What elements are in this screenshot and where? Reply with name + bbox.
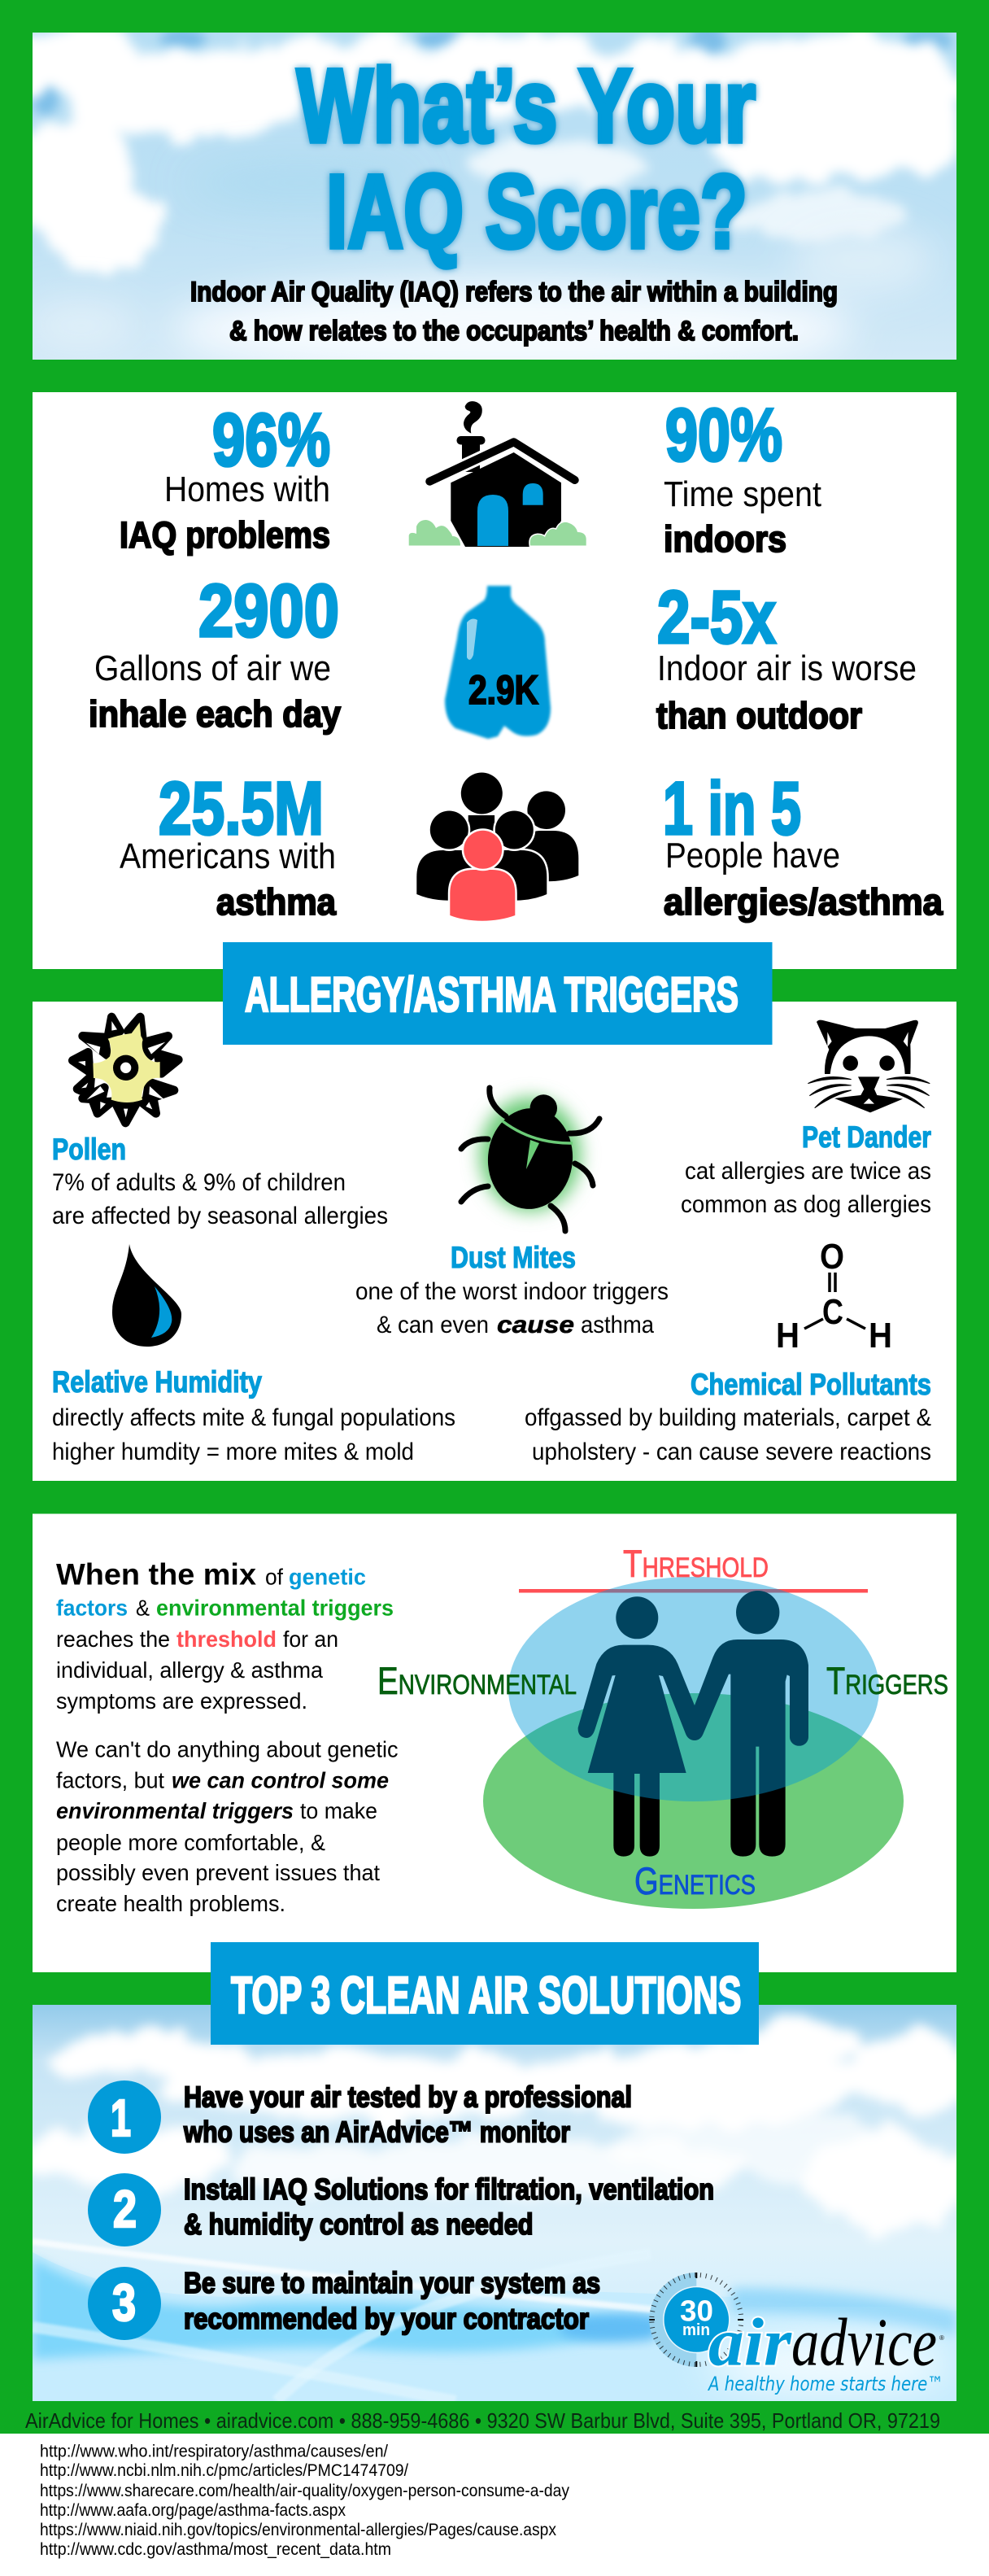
icon: house (409, 401, 586, 547)
text: dust mites: cause (497, 1312, 574, 1338)
banner: allergy/asthma triggers (223, 942, 773, 1045)
intro text: & how relates to the occupants’ health & comfort. (229, 316, 799, 347)
text block: explanation: for an (283, 1626, 338, 1652)
text: dust mites: asthma (581, 1312, 654, 1338)
text block: explanation: genetic (289, 1564, 366, 1590)
step 3 (88, 2266, 600, 2340)
panel: header (4, 23, 968, 378)
icon: formaldehyde molecule: C (822, 1292, 843, 1332)
stat: 2-5x: Indoor air is worse (657, 648, 917, 688)
stat: 1 in 5 (663, 767, 943, 923)
logo: airadvice (649, 2273, 944, 2395)
intro text: Indoor Air Quality (IAQ) refers to the air within a building (190, 277, 838, 308)
stat: 2-5x: 2-5x (657, 576, 776, 659)
text block: explanation: symptoms are expressed. (56, 1688, 307, 1714)
step 1: Have your air tested by a professional (184, 2080, 632, 2114)
icon: group of people (416, 773, 578, 921)
text block: explanation: individual, allergy & asthma (56, 1657, 323, 1683)
intro text (190, 277, 838, 347)
text: chemical pollutants: upholstery - can cause severe reactions (532, 1439, 931, 1465)
text: chemical pollutants: offgassed by building materials, carpet & (525, 1404, 931, 1431)
text block: explanation: to make (300, 1798, 377, 1823)
stat: 25.5M (120, 767, 337, 923)
icon: formaldehyde molecule: H (869, 1316, 892, 1356)
stat: 2900 gallons (89, 570, 341, 735)
panel: triggers (33, 1002, 956, 1481)
icon: cat (808, 1020, 930, 1112)
text: pollen (52, 1133, 388, 1229)
text: pet dander: Pet Dander (802, 1120, 931, 1154)
logo: airadvice: ® (939, 2334, 944, 2342)
text: dust mites: one of the worst indoor triggers (355, 1278, 669, 1305)
panel: statistics (33, 392, 956, 969)
text block: explanation: threshold (176, 1626, 277, 1652)
icon: formaldehyde molecule: O (820, 1237, 844, 1277)
icon: milk jug: 2.9K (468, 667, 538, 713)
step 2: Install IAQ Solutions for filtration, ventilation (184, 2172, 714, 2206)
step 1: 1 (111, 2089, 131, 2147)
logo: airadvice: min (682, 2321, 710, 2339)
logo: airadvice: 30 (680, 2294, 713, 2328)
stat: 96% homes (120, 399, 330, 556)
banner: top 3 clean air solutions (211, 1942, 759, 2045)
step 2: & humidity control as needed (184, 2207, 534, 2241)
step 2 (88, 2172, 714, 2246)
text: pet dander: common as dog allergies (681, 1191, 931, 1218)
step 3: recommended by your contractor (184, 2302, 589, 2335)
text block: explanation: people more comfortable, & (56, 1830, 325, 1855)
title: What’s Your (297, 48, 756, 164)
step 3: 3 (112, 2273, 136, 2332)
stat: 96% homes: IAQ problems (120, 514, 330, 556)
logo: airadvice: air (708, 2305, 792, 2381)
text: pet dander (681, 1120, 931, 1218)
stat: 2900 gallons: inhale each day (89, 693, 341, 735)
text block: explanation: of (265, 1564, 283, 1590)
step 3: Be sure to maintain your system as (184, 2266, 600, 2299)
text: chemical pollutants (525, 1368, 931, 1465)
logo: airadvice: A healthy home starts here™ (707, 2373, 943, 2395)
stat: 2900 gallons: 2900 (198, 570, 339, 653)
sources list: http://www.cdc.gov/asthma/most_recent_data.htm (40, 2540, 391, 2559)
step 1 (88, 2080, 632, 2154)
label: genetics: GENETICS (634, 1859, 756, 1902)
stat: 96% homes: Homes with (164, 469, 330, 509)
stat: 1 in 5: allergies/asthma (664, 881, 943, 923)
stat: 2-5x: than outdoor (656, 695, 862, 736)
text: chemical pollutants: Chemical Pollutants (691, 1368, 931, 1401)
text: pet dander: cat allergies are twice as (685, 1158, 931, 1185)
stat: 90% time: Time spent (664, 474, 821, 514)
text block: explanation: environmental triggers (56, 1798, 294, 1823)
stat: 25.5M: 25.5M (159, 767, 324, 850)
sources list: http://www.who.int/respiratory/asthma/causes/en/ (40, 2443, 388, 2460)
text block: explanation: When the mix (56, 1557, 256, 1591)
stat: 96% homes: 96% (212, 399, 330, 482)
stat: 90% time (664, 394, 821, 560)
text block: explanation: create health problems. (56, 1891, 285, 1916)
banner: top 3 clean air solutions: TOP 3 CLEAN AIR SOLUTIONS (231, 1966, 742, 2024)
sources list: http://www.ncbi.nlm.nih.c/pmc/articles/PMC1474709/ (40, 2461, 408, 2480)
stat: 1 in 5: 1 in 5 (663, 767, 801, 850)
panel: solutions (16, 2005, 976, 2401)
text: pollen: 7% of adults & 9% of children (52, 1169, 346, 1196)
text block: explanation: factors, but (56, 1767, 164, 1793)
text block: explanation: We can't do anything about genetic (56, 1736, 399, 1762)
stat: 90% time: indoors (664, 518, 786, 560)
text: relative humidity: higher humdity = more mites & mold (52, 1439, 414, 1465)
stat: 1 in 5: People have (665, 836, 840, 875)
title (297, 48, 756, 270)
text: relative humidity: directly affects mite & fungal populations (52, 1404, 455, 1431)
text block: explanation: & (136, 1595, 150, 1621)
panel: threshold explanation (33, 1513, 956, 1972)
sources list (40, 2443, 569, 2559)
diagram: threshold venn with couple (377, 1542, 948, 1909)
icon: formaldehyde molecule (776, 1237, 892, 1356)
text block: explanation: environmental triggers (156, 1595, 394, 1621)
icon: water drop (112, 1244, 181, 1347)
text block: explanation: we can control some (172, 1767, 389, 1793)
sources list: https://www.sharecare.com/health/air-quality/oxygen-person-consume-a-day (40, 2482, 569, 2500)
step 2: 2 (113, 2180, 137, 2238)
text: dust mites (355, 1241, 669, 1338)
text: pollen: are affected by seasonal allergies (52, 1203, 388, 1229)
text block: explanation: factors (56, 1595, 128, 1621)
logo: airadvice: advice (791, 2305, 937, 2381)
text: relative humidity (52, 1365, 455, 1465)
stat: 25.5M: asthma (216, 881, 337, 923)
stat: 2-5x (656, 576, 917, 736)
step 1: who uses an AirAdvice™ monitor (183, 2115, 570, 2148)
label: triggers: TRIGGERS (826, 1659, 948, 1702)
icon: pollen (72, 1017, 178, 1123)
icon: formaldehyde molecule: H (776, 1316, 799, 1356)
text: dust mites: Dust Mites (451, 1241, 576, 1274)
stat: 2900 gallons: Gallons of air we (94, 648, 331, 688)
stat: 90% time: 90% (665, 394, 782, 477)
text: relative humidity: Relative Humidity (52, 1365, 262, 1399)
text: dust mites: & can even (377, 1312, 489, 1338)
label: environmental: ENVIRONMENTAL (377, 1659, 577, 1702)
label: threshold: THRESHOLD (623, 1542, 769, 1585)
sources list: https://www.niaid.nih.gov/topics/environmental-allergies/Pages/cause.aspx (40, 2521, 556, 2539)
icon: milk jug (445, 586, 551, 739)
stat: 25.5M: Americans with (120, 836, 336, 876)
banner: allergy/asthma triggers: ALLERGY/ASTHMA TRIGGERS (245, 967, 738, 1022)
text block: explanation: possibly even prevent issues that (56, 1860, 380, 1885)
icon: dust mite (461, 1088, 599, 1231)
title: IAQ Score? (326, 154, 747, 270)
sources list: http://www.aafa.org/page/asthma-facts.aspx (40, 2501, 346, 2520)
text block: explanation: reaches the (56, 1626, 170, 1652)
text: pollen: Pollen (52, 1133, 126, 1166)
text block: explanation (56, 1557, 399, 1916)
icon: couple holding hands (578, 1591, 808, 1857)
